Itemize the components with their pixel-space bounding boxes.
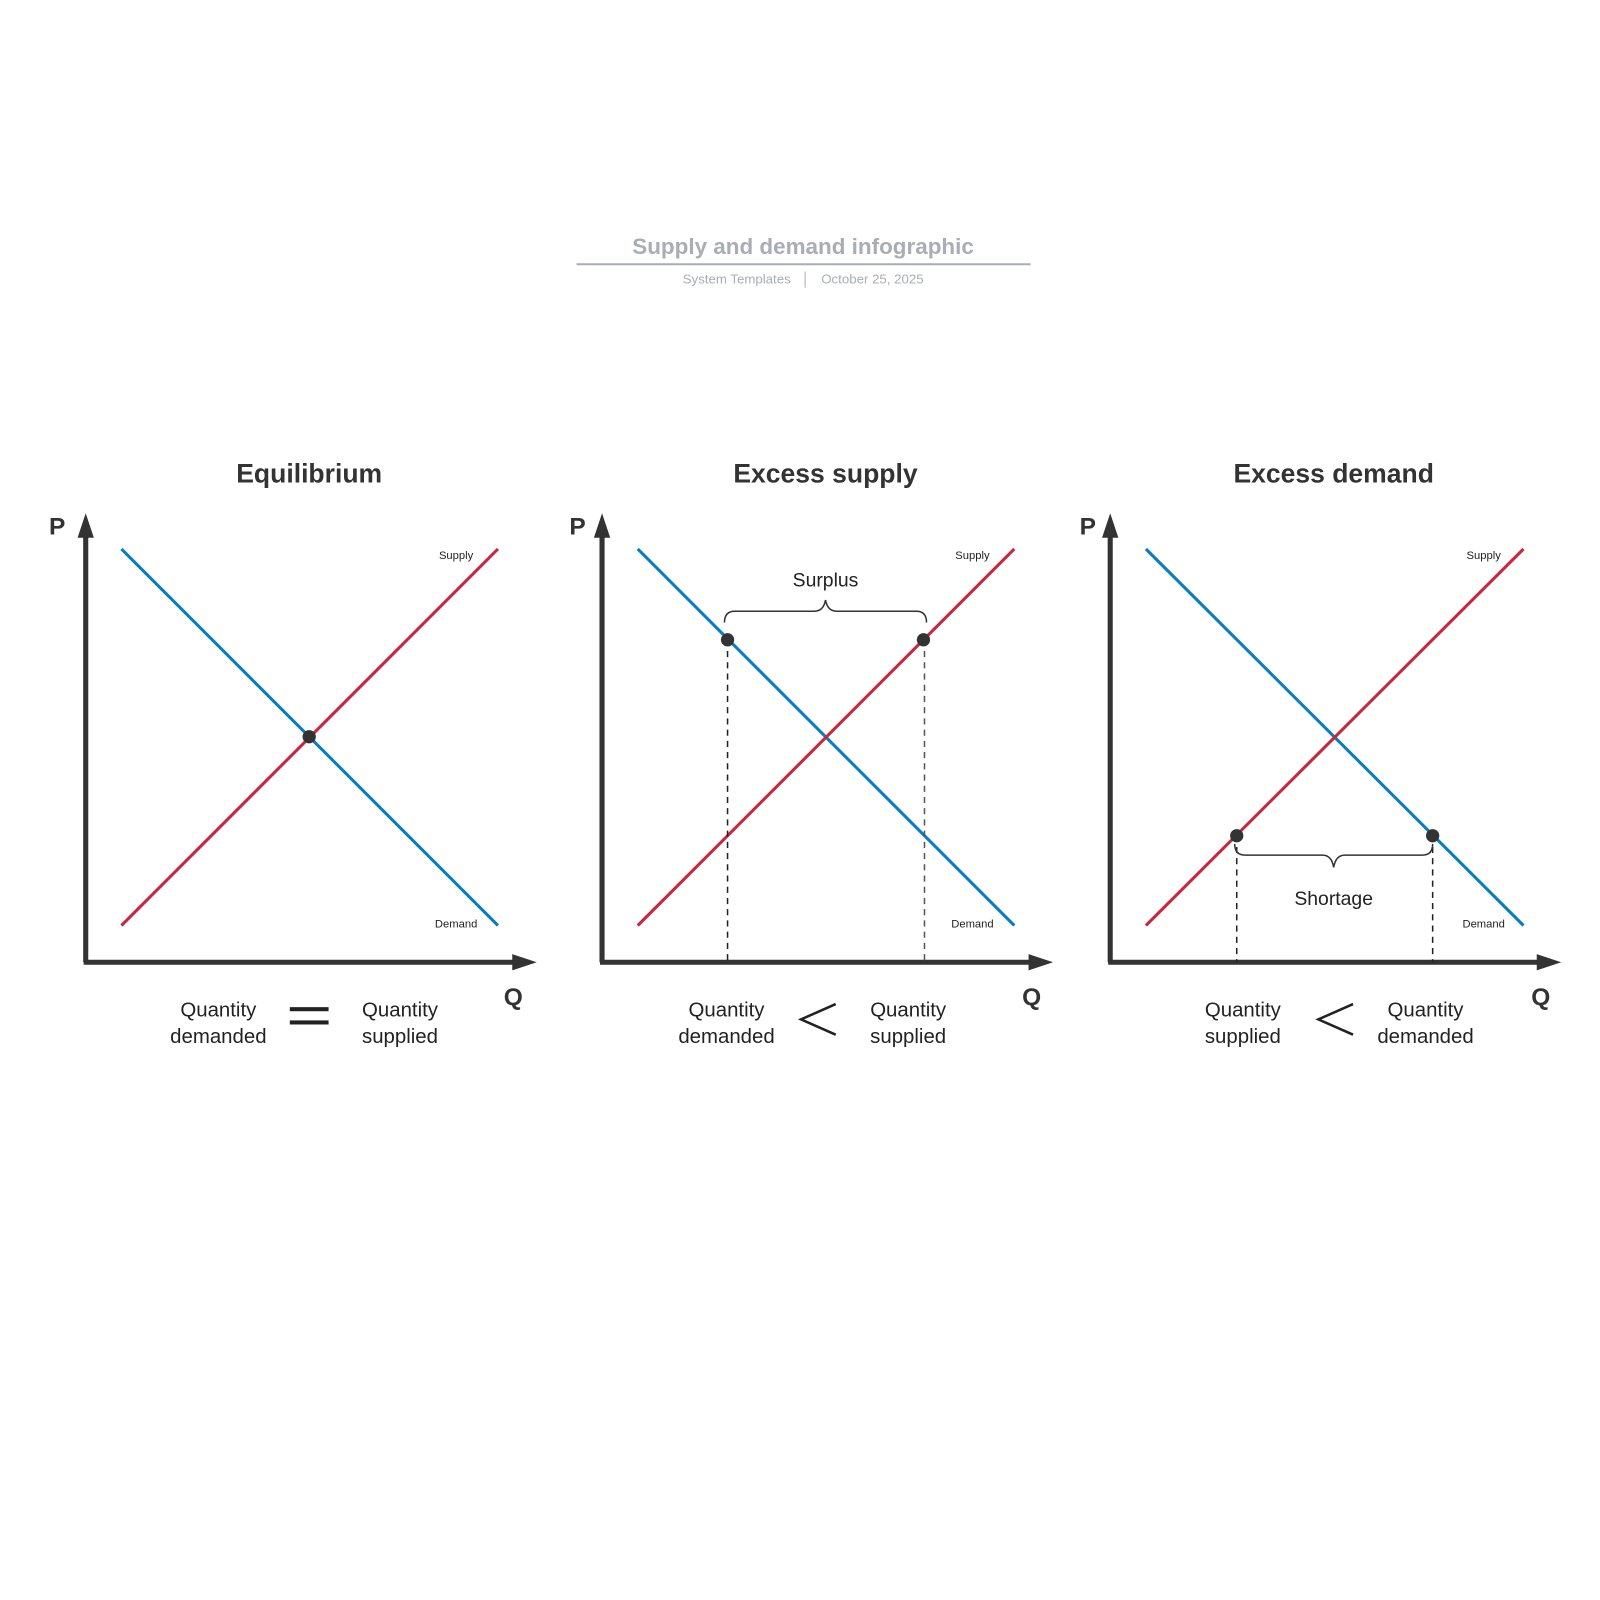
- title: [577, 234, 1031, 288]
- text: inequality: Quantity: [1205, 999, 1282, 1021]
- heading: excess demand: Excess demand: [1233, 459, 1434, 489]
- heading: equilibrium: Equilibrium: [236, 459, 382, 489]
- chart: equilibrium: Supply: [439, 550, 474, 562]
- panel: excess supply: [569, 459, 1053, 1048]
- chart: excess demand: Shortage: [1294, 888, 1373, 910]
- chart: excess supply: Supply: [955, 550, 990, 562]
- text: equation: Quantity: [180, 999, 257, 1021]
- chart: equilibrium: P: [49, 514, 65, 541]
- panel: equilibrium: [49, 459, 537, 1048]
- text: equation: supplied: [362, 1026, 438, 1048]
- text: inequality: demanded: [678, 1026, 775, 1048]
- chart: equilibrium: [49, 513, 537, 1011]
- chart: excess supply: Surplus: [793, 570, 858, 592]
- title: System Templates: [683, 272, 791, 287]
- text: inequality: supplied: [1205, 1026, 1281, 1048]
- text: inequality: supplied: [870, 1026, 946, 1048]
- chart: equilibrium: Demand: [435, 919, 477, 931]
- chart: excess supply: Demand: [951, 919, 994, 931]
- title: Supply and demand infographic: [632, 234, 974, 259]
- text: equation: [170, 999, 439, 1048]
- text: inequality: Quantity: [870, 999, 947, 1021]
- text: inequality: [678, 999, 947, 1048]
- panel: excess demand: [1080, 459, 1561, 1048]
- text: inequality: Quantity: [1388, 999, 1464, 1021]
- text: inequality: demanded: [1377, 1026, 1474, 1048]
- chart: excess demand: Supply: [1467, 550, 1501, 562]
- chart: excess supply: [569, 513, 1053, 1011]
- text: equation: Quantity: [362, 999, 439, 1021]
- chart: equilibrium: Q: [504, 984, 523, 1011]
- text: equation: demanded: [170, 1026, 267, 1048]
- chart: excess demand: P: [1080, 514, 1096, 541]
- chart: excess demand: [1080, 513, 1561, 1011]
- brace: shortage: [1235, 844, 1433, 867]
- text: inequality: [1205, 999, 1474, 1048]
- chart: excess supply: Q: [1022, 984, 1041, 1011]
- chart: excess supply: P: [569, 514, 586, 541]
- chart: excess demand: Demand: [1462, 919, 1505, 931]
- brace: surplus: [724, 600, 927, 622]
- chart: excess demand: Q: [1531, 984, 1550, 1011]
- title: October 25, 2025: [821, 272, 924, 287]
- heading: excess supply: Excess supply: [733, 459, 918, 489]
- text: inequality: Quantity: [689, 999, 765, 1021]
